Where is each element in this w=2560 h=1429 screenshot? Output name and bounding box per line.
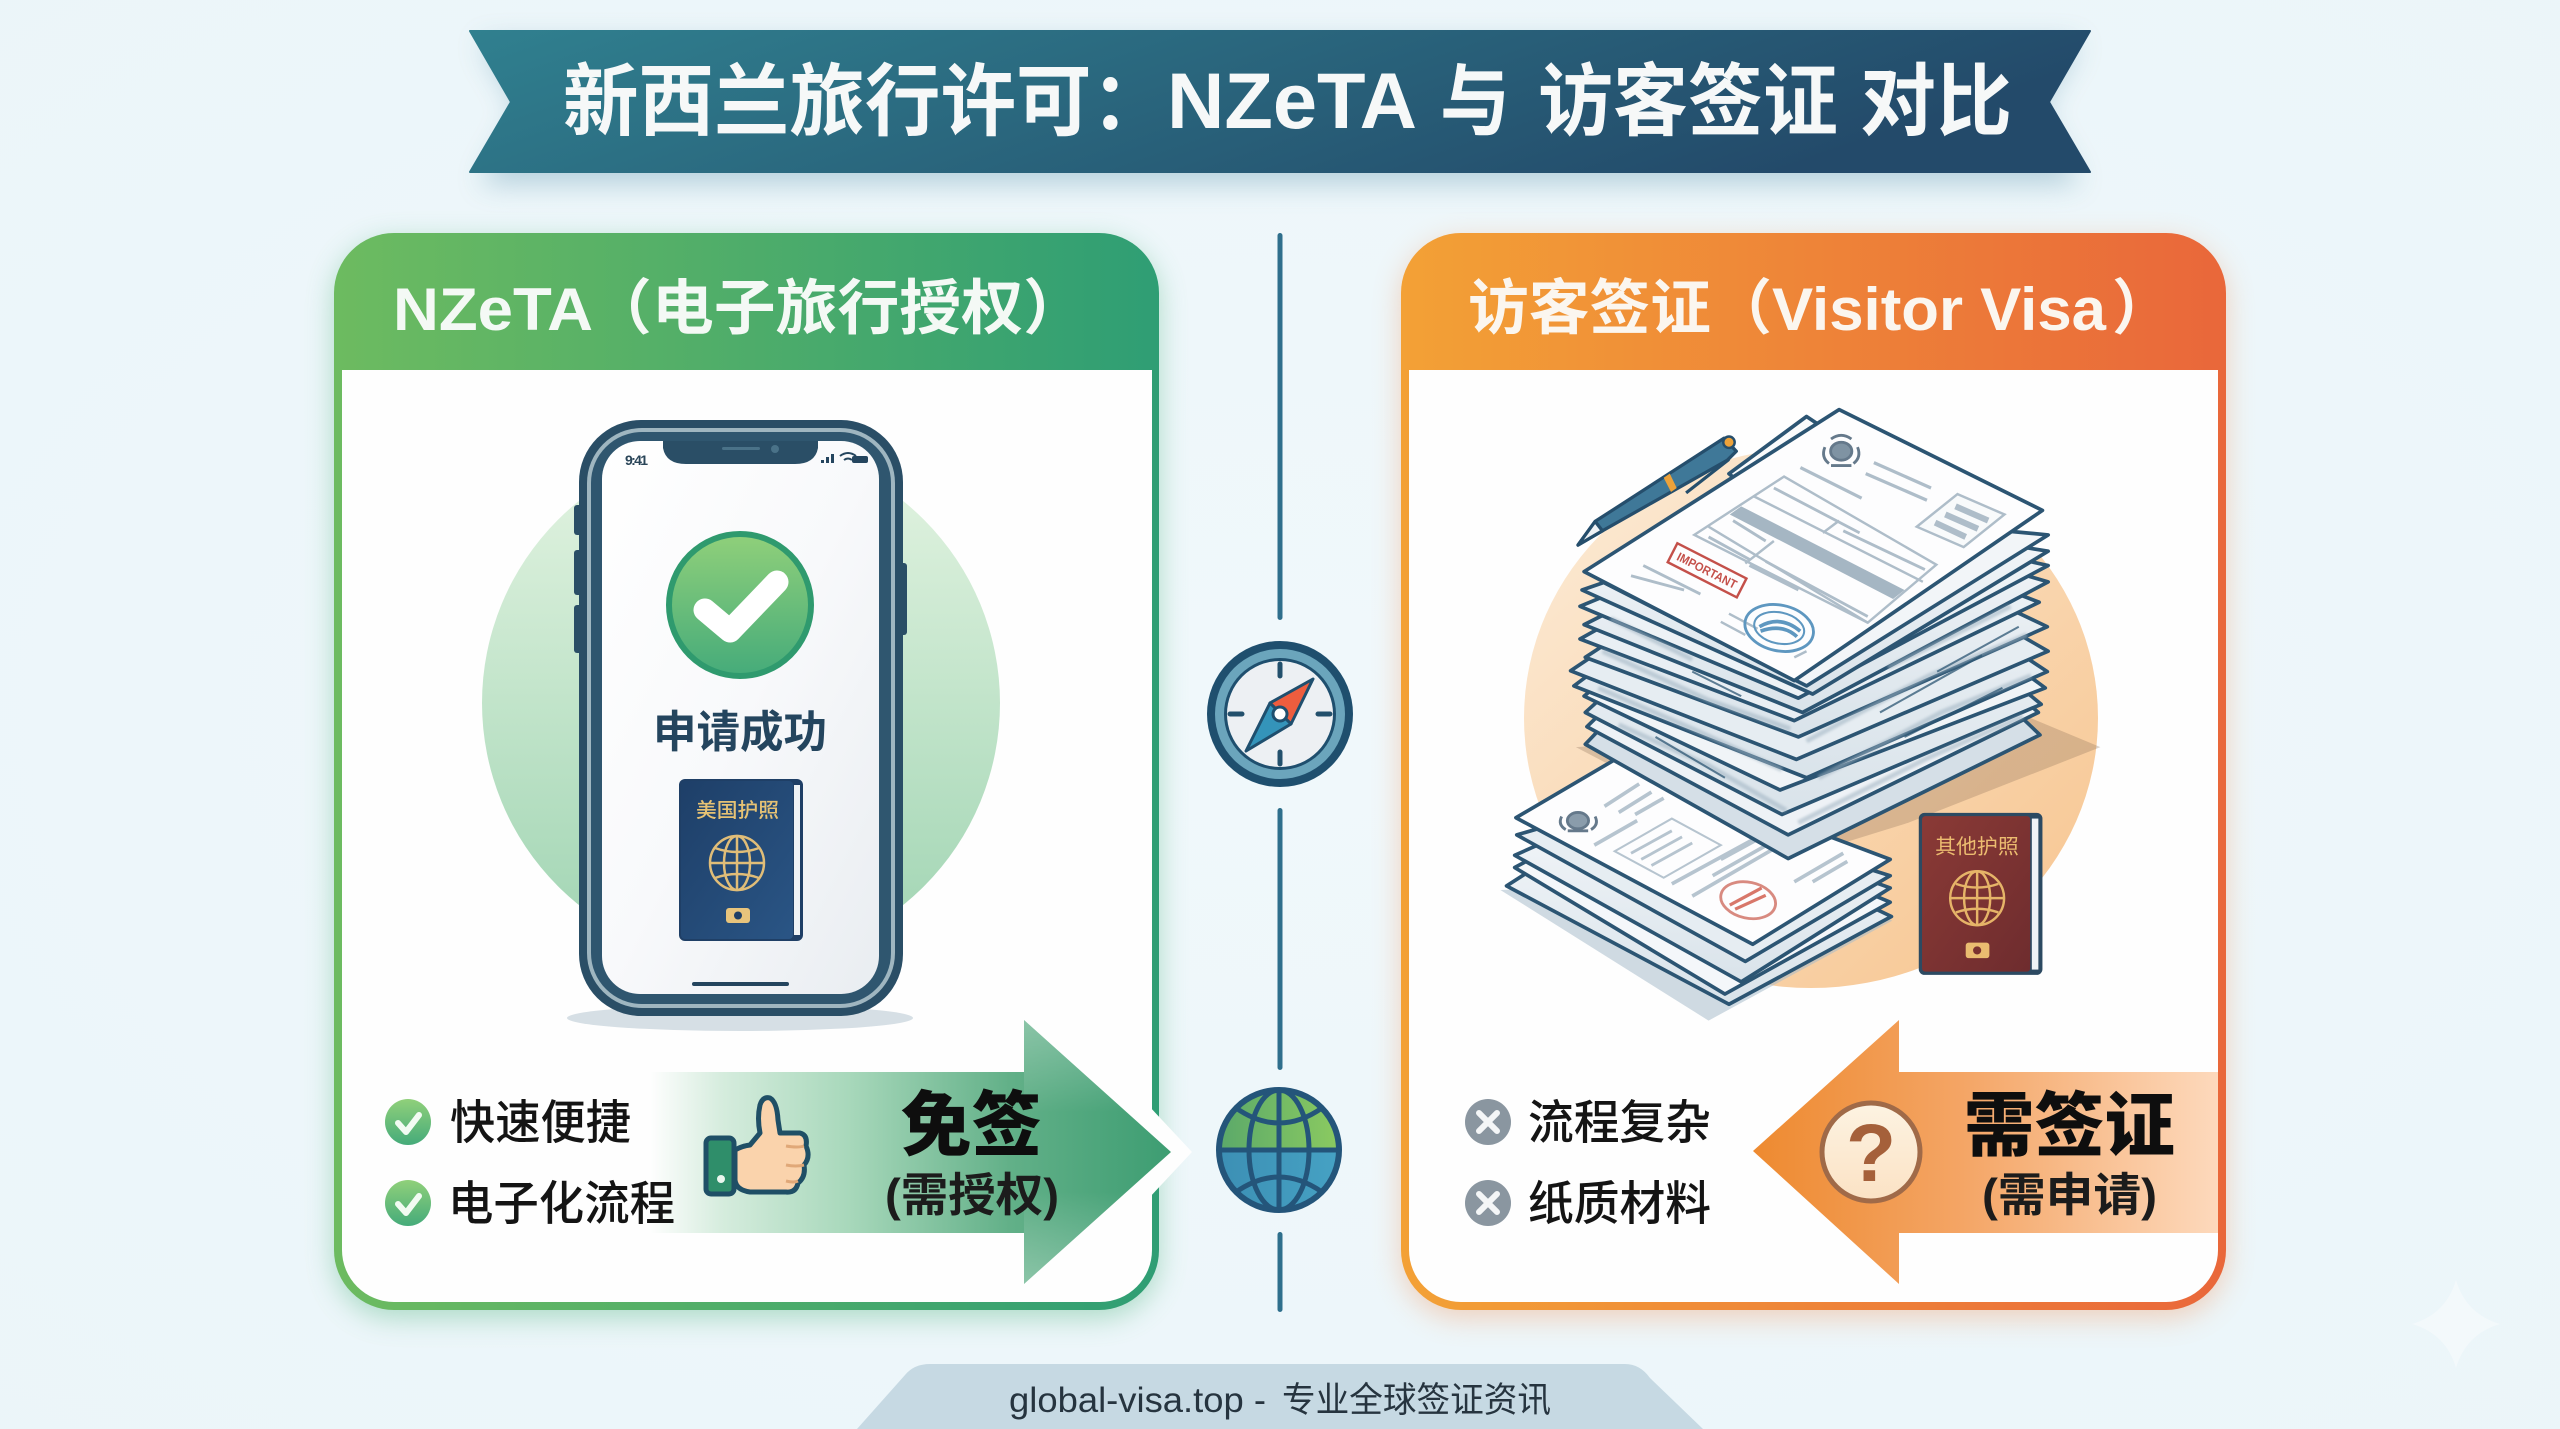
text: visa free: (需授权): [885, 1169, 1059, 1221]
heading: Visitor Visa: 访客签证: [1468, 275, 1711, 342]
icon: thumbs up: [706, 1098, 808, 1194]
crest: [1824, 435, 1859, 466]
title text: NZeTA: [1167, 56, 1417, 145]
icon: sparkle watermark: [2412, 1280, 2500, 1368]
stamp blue: [1740, 598, 1818, 658]
panel: Visitor Visa: [1401, 233, 2226, 1318]
list: cons: 纸质材料: [1528, 1177, 1711, 1230]
text: visa free: 免签: [901, 1087, 1042, 1166]
list: pros: 电子化流程: [448, 1177, 675, 1230]
list: cons: [1465, 1096, 1711, 1230]
heading: NZeTA: NZeTA: [393, 276, 593, 343]
passport: other: [1919, 813, 2042, 975]
text: visa required: (需申请): [1982, 1169, 2157, 1221]
main stack: [1571, 410, 2048, 859]
pen: [1578, 437, 1736, 545]
stamp: important: IMPORTANT: [1675, 550, 1740, 592]
form lines: [1631, 463, 1936, 657]
text: visa free: [885, 1087, 1059, 1221]
title banner: [470, 31, 2090, 184]
orange backdrop: [1524, 448, 2098, 988]
icon: globe: [1217, 1088, 1341, 1212]
text: visa required: [1964, 1087, 2175, 1221]
arrow: visa free: [650, 1020, 1192, 1284]
footer text: global-visa.top -: [1009, 1381, 1266, 1420]
title text: 对比: [1860, 57, 2012, 146]
title text: [563, 56, 2012, 146]
heading: NZeTA: （电子旅行授权）: [590, 275, 1085, 342]
paper wrinkles: [1598, 606, 2031, 823]
small stack: [1507, 757, 1891, 1004]
home indicator: [692, 982, 789, 986]
status bar: 9:41: [625, 452, 648, 468]
check circle: [669, 534, 811, 676]
text: visa required: 需签证: [1964, 1087, 2175, 1165]
arrow: visa required: [1753, 1020, 2218, 1284]
footer text: 专业全球签证资讯: [1282, 1381, 1551, 1420]
list: pros: [385, 1096, 675, 1230]
shadows: [1576, 717, 2100, 859]
passport: other: 其他护照: [1935, 835, 2019, 858]
list: cons: 流程复杂: [1528, 1096, 1711, 1149]
icon: compass: [1207, 641, 1353, 787]
passport: US: 美国护照: [696, 799, 779, 822]
heading: Visitor Visa: ）: [2112, 275, 2172, 342]
heading: Visitor Visa: Visitor Visa: [1772, 276, 2107, 343]
title text: 访客签证: [1538, 57, 1838, 146]
stamp red: [1717, 877, 1779, 924]
footer text: [1009, 1381, 1551, 1420]
passport: US: [679, 779, 803, 941]
footer tab: [857, 1364, 1703, 1429]
heading: Visitor Visa: （: [1712, 275, 1772, 342]
panel: NZeTA: [334, 233, 1192, 1318]
center divider with icons: [1278, 233, 1282, 1312]
heading: Visitor Visa: [1468, 275, 2172, 343]
green circle backdrop: [482, 444, 1000, 962]
icon: phone: [567, 420, 913, 1031]
title text: 新西兰旅行许可：: [563, 57, 1167, 146]
icon: question mark: [1822, 1103, 1920, 1201]
title text: 与: [1440, 57, 1510, 146]
illustration: documents and pen: [1500, 410, 2100, 1021]
crest small: [1560, 812, 1596, 831]
icon: question mark: ?: [1846, 1108, 1896, 1199]
list: pros: 快速便捷: [450, 1096, 631, 1149]
heading: NZeTA: [393, 275, 1085, 343]
text: success: 申请成功: [653, 708, 827, 757]
